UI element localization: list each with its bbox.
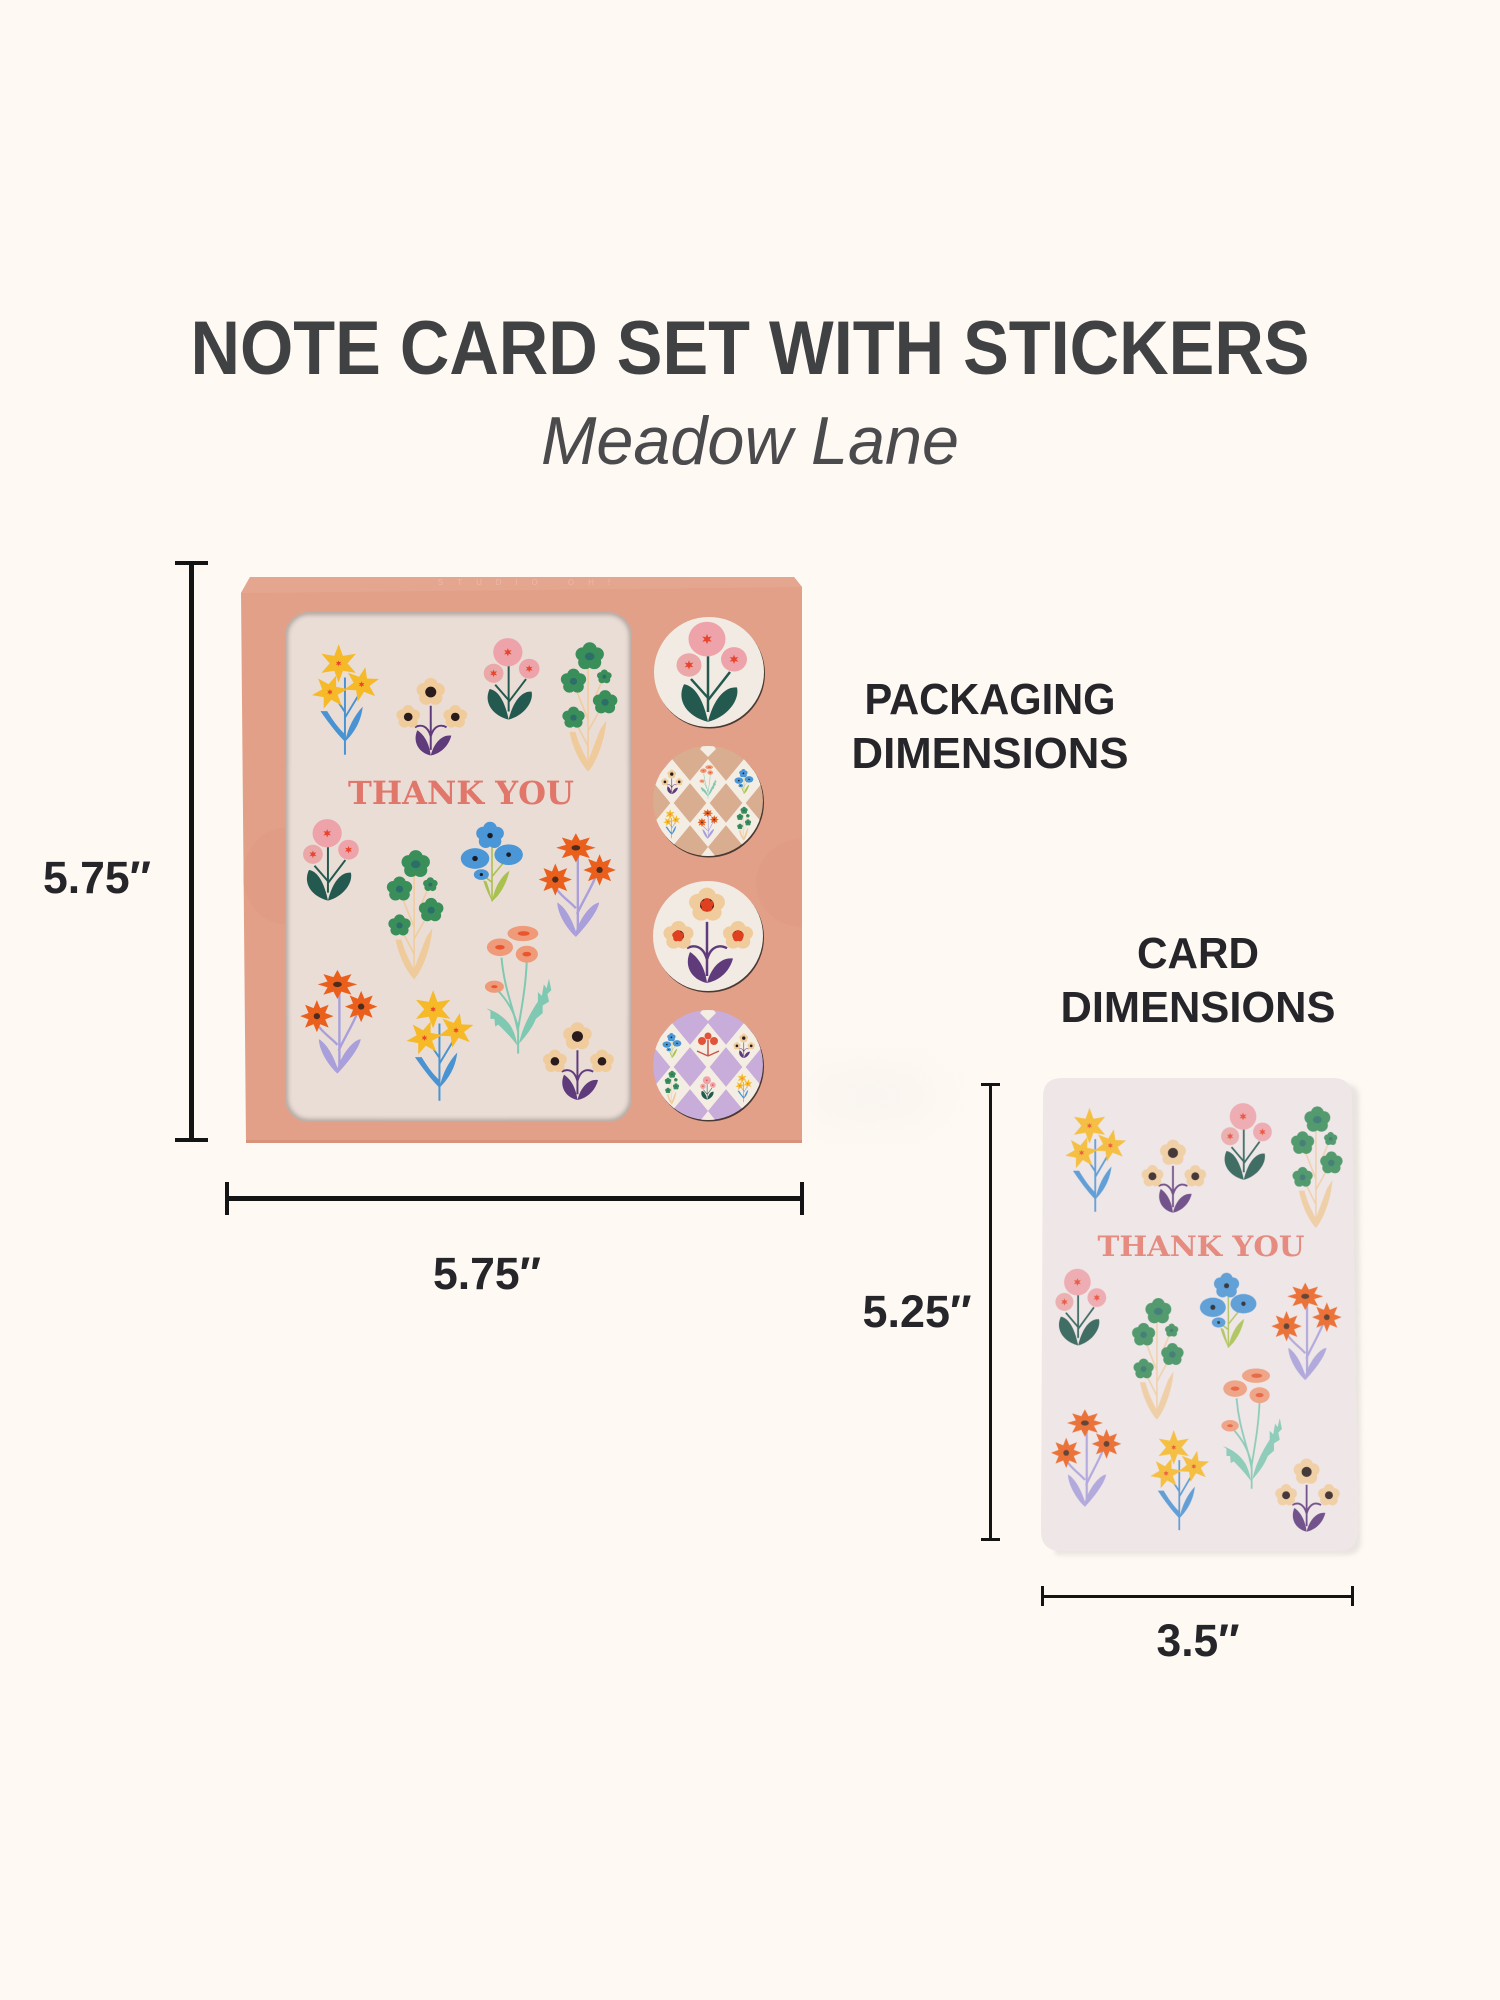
flower: peach	[396, 678, 467, 756]
flower: yellow	[309, 644, 381, 755]
dimension: card height	[981, 1083, 1000, 1541]
thank you text on card: THANK YOU	[1098, 1230, 1304, 1263]
box brand text: STUDIO OH!	[438, 578, 610, 587]
sticker: peach flower	[653, 881, 764, 992]
flower: blue	[461, 822, 523, 901]
flower: peach	[1142, 1140, 1206, 1213]
flower: pink 2	[1055, 1269, 1106, 1345]
flower: peach 2	[1275, 1459, 1340, 1532]
flower: orange 2	[300, 970, 377, 1074]
subtitle: Meadow Lane	[541, 403, 959, 479]
box shadow	[800, 1071, 940, 1119]
sticker: lavender diamond pattern	[653, 1010, 764, 1122]
flower: yellow 2	[403, 990, 475, 1101]
sticker: pink flower	[654, 617, 765, 728]
flower: yellow	[1062, 1108, 1128, 1212]
heading: card dimensions	[1060, 929, 1336, 1032]
flower: green 2	[1132, 1298, 1184, 1420]
flower: orange	[1271, 1283, 1342, 1380]
flower: coral	[1221, 1368, 1282, 1489]
heading: packaging dimensions: PACKAGING	[864, 675, 1116, 724]
title: NOTE CARD SET WITH STICKERS	[190, 306, 1310, 391]
flower: pink 2	[303, 819, 359, 901]
label: packaging height: 5.75″	[43, 852, 151, 903]
flower: orange 2	[1051, 1409, 1121, 1507]
box body	[241, 577, 802, 1143]
flower: pink	[484, 638, 539, 720]
panel: packaging box	[241, 577, 848, 1143]
card body	[1041, 1078, 1358, 1551]
thumb notches	[244, 870, 245, 886]
box top band	[241, 577, 802, 593]
flower: coral	[485, 926, 551, 1054]
card shadow	[1055, 1084, 1361, 1555]
flower: yellow 2	[1148, 1430, 1211, 1530]
label: card width: 3.5″	[1156, 1615, 1240, 1666]
heading: card dimensions: DIMENSIONS	[1060, 983, 1336, 1032]
card flowers	[1051, 1103, 1343, 1532]
heading: card dimensions: CARD	[1137, 929, 1259, 978]
label: packaging width: 5.75″	[433, 1248, 541, 1299]
sticker: tan diamond pattern	[653, 746, 764, 858]
label: card height: 5.25″	[862, 1286, 972, 1337]
flower: pink	[1221, 1103, 1272, 1180]
flower: blue	[1200, 1273, 1256, 1348]
box card flowers	[300, 638, 617, 1101]
card window	[285, 612, 632, 1122]
box bottom edge	[246, 1140, 802, 1143]
thank you text on box card: THANK YOU	[348, 774, 574, 812]
flower: green	[561, 642, 617, 772]
heading: packaging dimensions	[852, 675, 1128, 778]
dimension: card width	[1041, 1586, 1354, 1606]
flower: green 2	[387, 850, 443, 979]
dimension: packaging width	[225, 1182, 804, 1215]
flower: peach 2	[543, 1022, 614, 1100]
panel: note card	[1041, 1078, 1358, 1551]
flower: orange	[539, 833, 616, 937]
heading: packaging dimensions: DIMENSIONS	[852, 729, 1128, 778]
flower: green	[1291, 1106, 1343, 1228]
dimension: packaging height	[175, 561, 208, 1142]
